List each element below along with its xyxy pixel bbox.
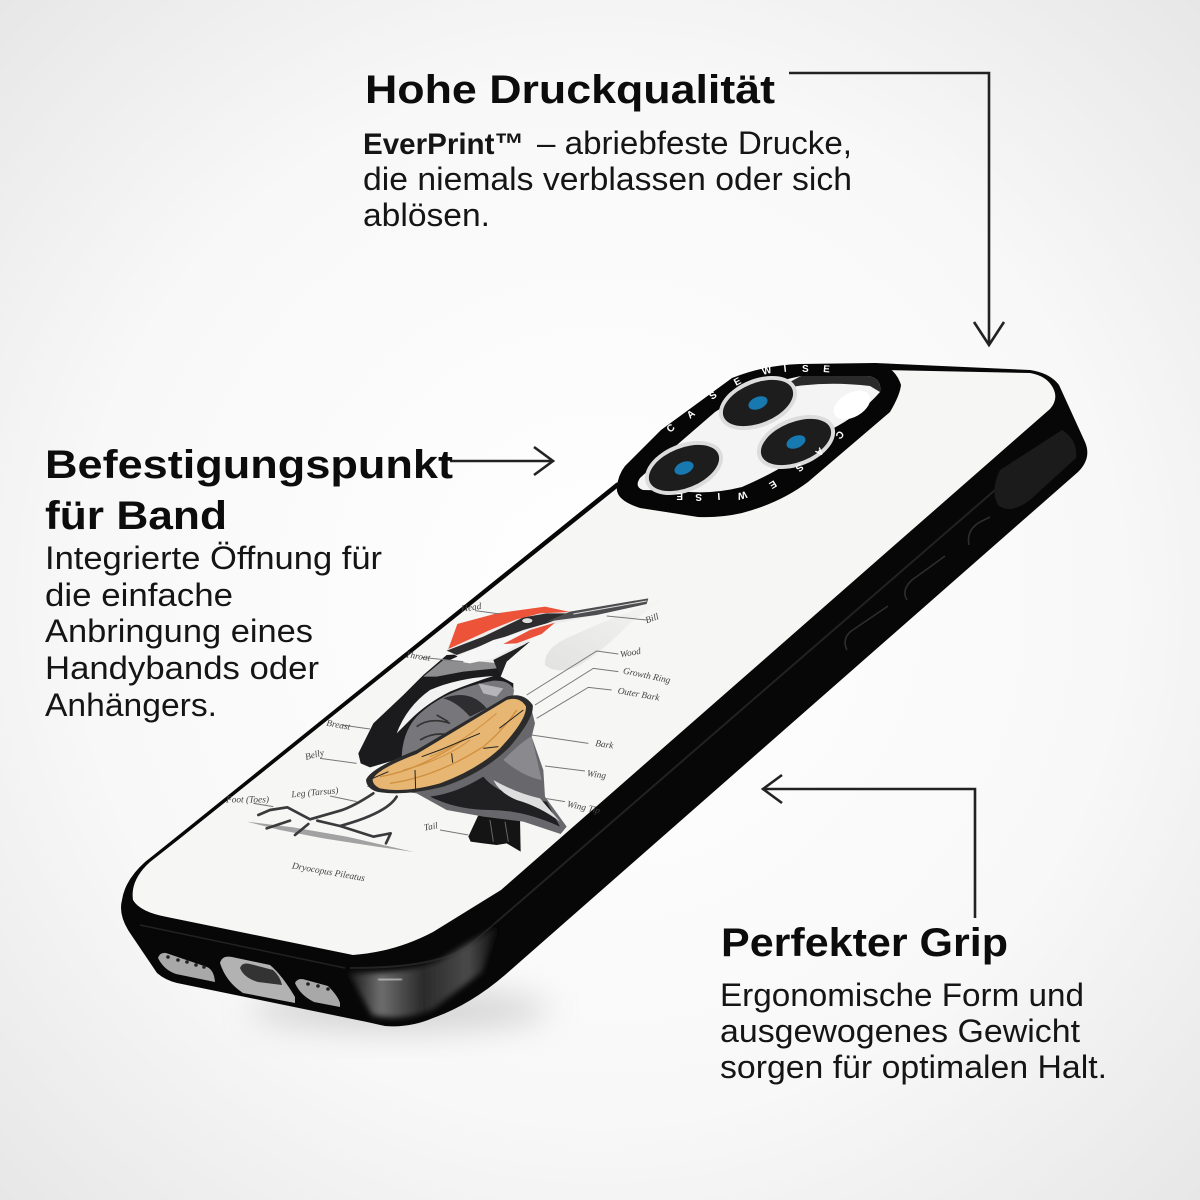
reflection top right [994, 430, 1076, 509]
body: die einfache [45, 577, 233, 613]
white face stripe [450, 623, 550, 663]
case body [121, 363, 1087, 1026]
volume down [845, 606, 888, 650]
part labels: Wing Tip [566, 800, 601, 817]
part labels: Leg (Tarsus) [290, 785, 339, 800]
part labels: Breast [325, 719, 351, 733]
part labels: Head [460, 602, 482, 615]
back white panel [133, 370, 1055, 955]
part labels: Bill [644, 612, 661, 626]
body: Anbringung eines [45, 613, 313, 649]
port: left speaker [158, 953, 215, 982]
heading: Hohe Druckqualität [365, 68, 775, 112]
port: charging [220, 957, 295, 1003]
action button [968, 517, 990, 545]
text block: strap anchor [45, 443, 453, 723]
part labels: Wing [586, 769, 607, 782]
body: ausgewogenes Gewicht [720, 1013, 1080, 1049]
tail [468, 812, 521, 852]
apple-logo ghost [545, 597, 667, 670]
lens left [637, 430, 731, 506]
ground shadow [247, 822, 414, 852]
body [363, 125, 852, 233]
body [720, 977, 1107, 1085]
part labels: Dryocopus Pileatus [290, 861, 366, 884]
arrow: strap anchor [450, 447, 553, 475]
lower body [367, 703, 567, 834]
legs and claws [258, 793, 397, 843]
camera ring [617, 363, 901, 517]
heading: Befestigungspunkt [45, 443, 453, 487]
side buttons [845, 517, 990, 650]
lens right [749, 404, 843, 480]
flash [829, 385, 875, 425]
part labels: Throat [405, 650, 431, 664]
body: ablösen. [363, 197, 490, 233]
wood slice [373, 699, 526, 790]
beak [547, 598, 648, 622]
lens top [711, 365, 805, 441]
head [447, 598, 648, 663]
part labels: Belly [304, 748, 326, 763]
heading: für Band [45, 494, 227, 538]
illustration: woodpecker [225, 597, 672, 884]
white neck stripe [397, 676, 493, 733]
text block: print quality [363, 68, 852, 233]
phone shadow [250, 988, 550, 1032]
eye [522, 618, 533, 624]
body: die niemals verblassen oder sich [363, 161, 852, 197]
body: Anhängers. [45, 687, 217, 723]
body: Integrierte Öffnung für [45, 540, 382, 576]
part labels: Foot (Toes) [225, 795, 269, 806]
part labels [225, 602, 672, 884]
wing [402, 681, 514, 760]
body: Handybands oder [45, 650, 319, 686]
heading: Perfekter Grip [721, 921, 1008, 965]
part labels: Bark [595, 739, 615, 752]
text block: grip [720, 921, 1107, 1085]
red malar stripe [503, 623, 555, 644]
port: right speaker [295, 979, 340, 1007]
part labels: Growth Ring [622, 666, 672, 686]
highlight lines on corner [378, 979, 402, 980]
body: Ergonomische Form und [720, 977, 1084, 1013]
guide lines [253, 611, 647, 835]
phone case [121, 363, 1087, 1026]
body: EverPrint™ [363, 128, 524, 161]
corner sheen [348, 925, 498, 1018]
side band edge [350, 432, 1062, 968]
ring lettering: CASEWISECASEWISE [665, 364, 846, 502]
volume up [905, 556, 945, 600]
part labels: Outer Bark [617, 686, 661, 704]
body [45, 540, 382, 723]
wood slice ring [366, 695, 533, 793]
red crest [448, 607, 570, 649]
part labels: Wood [619, 647, 642, 660]
heading [45, 443, 453, 538]
body: – abriebfeste Drucke, [537, 125, 852, 161]
part labels: Tail [423, 821, 439, 834]
dark eye stripe [447, 613, 573, 655]
upper back [358, 642, 530, 767]
arrow: print quality [789, 73, 1004, 345]
throat shadow [493, 643, 527, 675]
arrow: grip [763, 775, 975, 918]
body: sorgen für optimalen Halt. [720, 1049, 1107, 1085]
bottom edge line [140, 925, 345, 968]
